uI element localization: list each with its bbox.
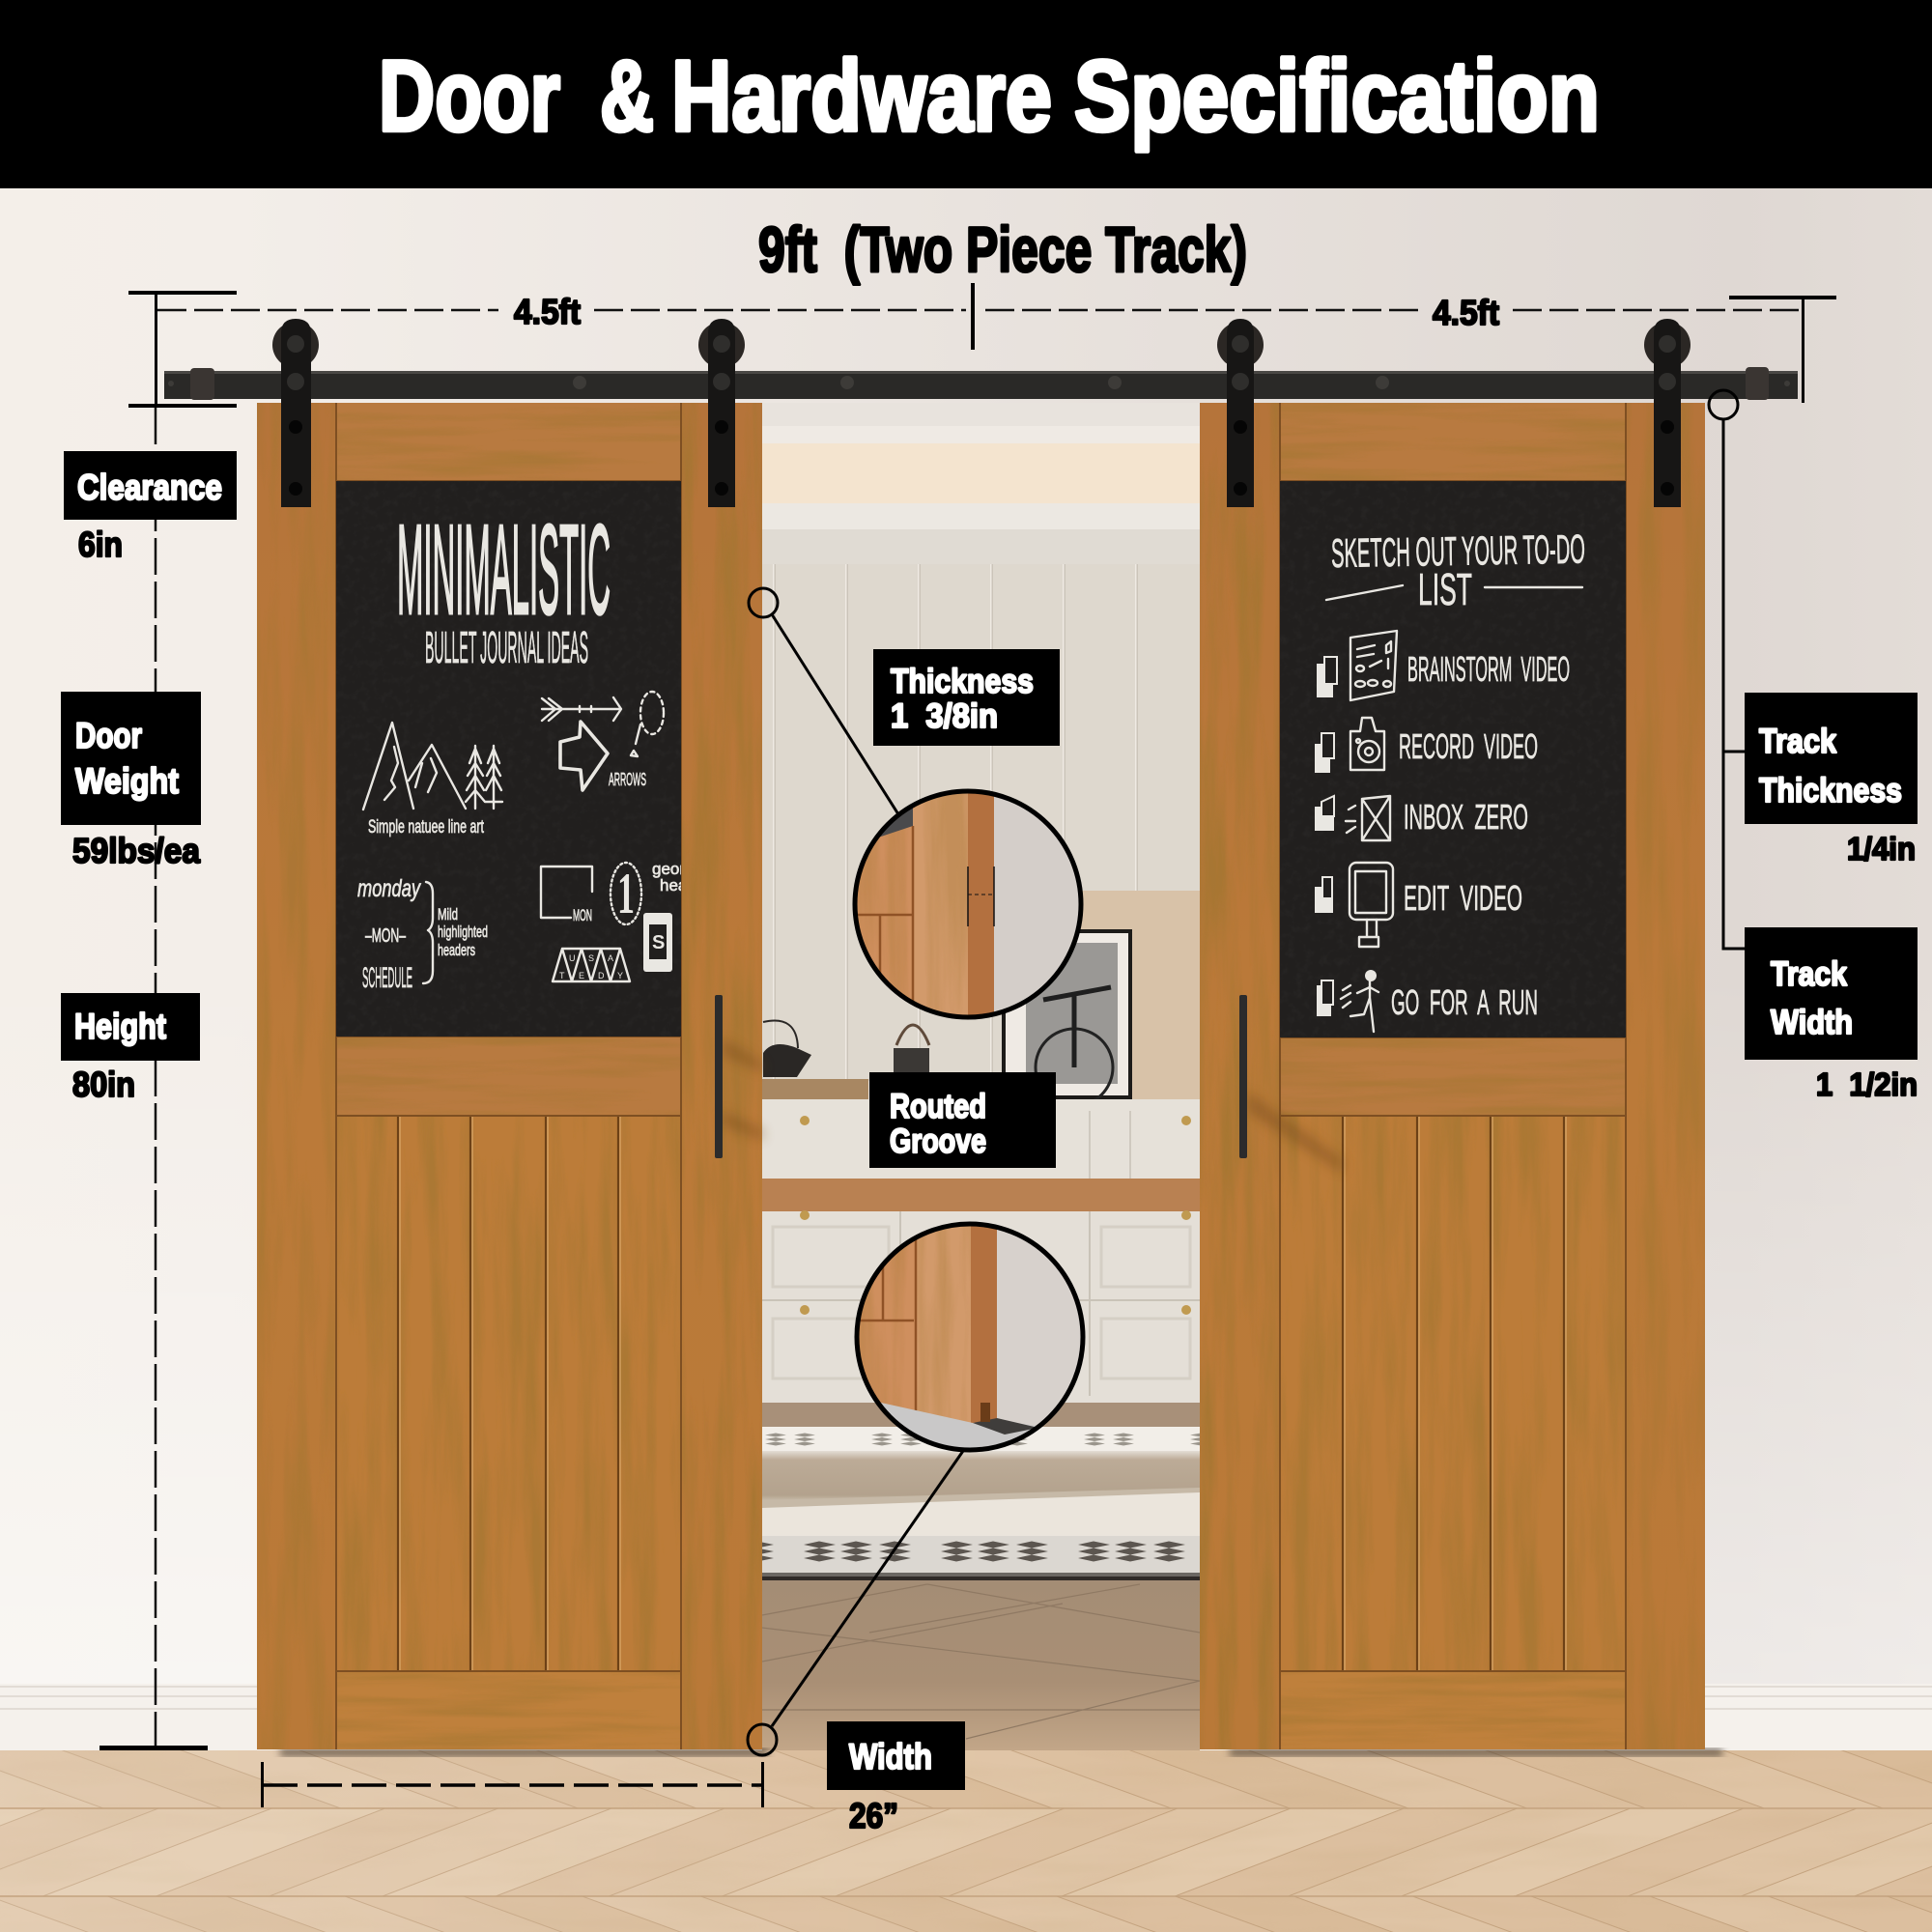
door height dashed line xyxy=(99,408,208,1750)
header bar xyxy=(0,0,1932,188)
track end stops xyxy=(190,367,1769,400)
teapots on counter xyxy=(763,1021,929,1077)
chalk item: inbox zero: INBOX ZERO xyxy=(1404,797,1528,837)
label: thickness: Thickness xyxy=(891,663,1034,700)
cutting board xyxy=(762,1079,868,1100)
chalk item: edit video xyxy=(1315,863,1522,947)
callout: track measurement leader xyxy=(1709,390,1745,949)
door width dimension xyxy=(261,1762,764,1807)
right track end bracket xyxy=(1729,296,1836,403)
hanger right door, right strap xyxy=(1644,319,1690,507)
right door stiles xyxy=(1200,403,1705,1749)
left door lower plank panels xyxy=(336,1116,681,1671)
chalk box, number and bunting: S xyxy=(652,932,665,953)
upper soffit and crown xyxy=(762,403,1200,564)
left 4.5ft label: 4.5ft xyxy=(514,292,581,331)
chalk item: brainstorm video xyxy=(1317,631,1570,700)
chalk item: edit video: EDIT VIDEO xyxy=(1404,878,1522,918)
text: MINIMALISTIC xyxy=(397,498,611,640)
chalk mountains and trees xyxy=(363,723,502,810)
label: height xyxy=(61,993,200,1104)
chalk box, number and bunting: T xyxy=(559,971,565,980)
label: width: Width xyxy=(849,1737,932,1776)
label: clearance: 6in xyxy=(78,525,123,564)
chalk box, number and bunting: Y xyxy=(617,971,623,980)
right 4.5ft label: 4.5ft xyxy=(1433,293,1499,332)
chalk box, number and bunting: U xyxy=(569,953,576,963)
label: clearance xyxy=(64,451,237,564)
label: door weight: Weight xyxy=(75,761,179,801)
label: door weight: 59lbs/ea xyxy=(72,831,201,870)
left barn door xyxy=(257,403,762,1749)
label: track thickness xyxy=(1745,693,1918,867)
clearance bracket xyxy=(128,291,237,408)
chalk caption: line art: Simple natuee line art xyxy=(368,817,484,838)
door handles xyxy=(715,995,1343,1174)
title: Door xyxy=(379,41,560,153)
chalk box, number and bunting: D xyxy=(598,971,605,980)
hanger straps and wheels xyxy=(272,319,1690,507)
label: routed groove: Groove xyxy=(890,1122,986,1160)
right chalkboard xyxy=(1280,481,1626,1037)
callout: routed groove magnifier xyxy=(855,1222,1094,1459)
title: Hardware xyxy=(671,41,1052,153)
chalk to-do heading xyxy=(1326,526,1585,614)
chalk schedule sample xyxy=(357,875,488,994)
callout: thickness magnifier xyxy=(855,787,1091,1019)
patterned rug xyxy=(762,1427,1200,1580)
label: routed groove xyxy=(869,1072,1056,1168)
right door lower plank panels xyxy=(1280,1116,1626,1671)
left chalkboard: ARROWS xyxy=(609,770,646,789)
label: track width: Track xyxy=(1771,955,1847,993)
label: track width: 1 1/2in xyxy=(1816,1066,1918,1102)
tan backsplash xyxy=(1024,891,1200,1099)
label: track thickness: Track xyxy=(1759,723,1836,760)
barn door track rail xyxy=(164,367,1798,400)
chalk box, number and bunting xyxy=(541,860,696,981)
label: clearance: Clearance xyxy=(77,468,222,507)
baseboard xyxy=(0,1684,1932,1750)
label: track width xyxy=(1745,927,1918,1102)
left door stiles xyxy=(257,403,762,1749)
right barn door xyxy=(1200,403,1705,1749)
upper cabinets xyxy=(762,1099,1200,1179)
chalk arrow sketches xyxy=(542,692,664,790)
chalk box, number and bunting: E xyxy=(579,971,584,980)
beadboard wall xyxy=(762,564,1200,1081)
chalk box, number and bunting: 1 xyxy=(617,862,635,925)
chalk item: go for a run: GO FOR A RUN xyxy=(1391,982,1538,1022)
chalk schedule sample: monday xyxy=(357,875,421,902)
label: door weight: Door xyxy=(75,716,142,755)
chalk box, number and bunting: head xyxy=(660,876,696,895)
label: width xyxy=(827,1721,965,1835)
interior floor xyxy=(762,1580,1200,1750)
door shadows on floor xyxy=(280,1748,1722,1756)
left chalkboard: BULLET JOURNAL IDEAS xyxy=(425,622,588,672)
label: door weight xyxy=(61,692,201,870)
chalk box, number and bunting: S xyxy=(588,953,594,963)
title xyxy=(379,41,1600,153)
callout: thickness leader xyxy=(749,588,898,814)
chalk schedule sample: Mild xyxy=(438,905,458,923)
hanger right door, left strap xyxy=(1217,319,1264,507)
track bolts xyxy=(168,376,1790,389)
chalk schedule sample: SCHEDULE xyxy=(362,962,412,994)
herringbone floor xyxy=(0,1750,1932,1932)
label: track thickness: Thickness xyxy=(1759,772,1902,810)
floor strip xyxy=(762,1403,1200,1427)
label: thickness: 1 3/8in xyxy=(891,697,998,735)
label: width: 26” xyxy=(849,1796,898,1835)
right chalkboard: BRAINSTORM VIDEO xyxy=(1407,649,1570,689)
label: height: 80in xyxy=(72,1065,135,1104)
chalk schedule sample: –MON– xyxy=(365,925,407,947)
chalk schedule sample: highlighted xyxy=(438,923,488,941)
hanger left door, left strap xyxy=(272,319,319,507)
left chalkboard xyxy=(336,481,696,1037)
chalk box, number and bunting: MON xyxy=(573,906,592,924)
left door rails xyxy=(336,403,681,1749)
interior room view through the doorway xyxy=(762,403,1200,1750)
track length heading: 9ft (Two Piece Track) xyxy=(758,213,1247,285)
chalk item: record video xyxy=(1315,718,1538,773)
lower cabinets xyxy=(762,1210,1200,1403)
label: height: Height xyxy=(74,1007,166,1046)
framed bicycle photo xyxy=(1002,929,1132,1106)
title: & xyxy=(600,41,654,153)
title: Specification xyxy=(1074,41,1600,153)
chalk schedule sample: headers xyxy=(438,941,475,959)
horizontal track dimension xyxy=(157,283,1801,350)
label: track width: Width xyxy=(1771,1004,1853,1041)
right door rails xyxy=(1280,403,1626,1749)
chalk item: inbox zero xyxy=(1315,796,1528,840)
hanger left door, right strap xyxy=(698,319,745,507)
label: routed groove: Routed xyxy=(890,1088,986,1125)
label: thickness xyxy=(873,649,1060,746)
label: track thickness: 1/4in xyxy=(1847,831,1916,867)
chalk to-do heading: LIST xyxy=(1418,564,1472,614)
callout: width leader xyxy=(748,1451,963,1755)
chalk box, number and bunting: geom xyxy=(652,860,694,878)
chalk box, number and bunting: A xyxy=(608,953,613,963)
right chalkboard: RECORD VIDEO xyxy=(1399,726,1538,766)
chalk item: go for a run xyxy=(1317,970,1538,1032)
right chalkboard: SKETCH OUT YOUR TO-DO xyxy=(1331,526,1585,576)
wood countertop xyxy=(762,1179,1200,1211)
